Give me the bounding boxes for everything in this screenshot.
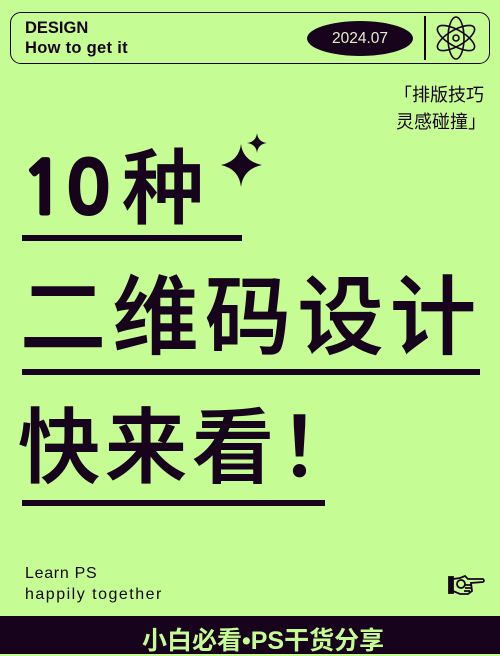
subtitle: 「排版技巧 <box>394 85 484 105</box>
banner text: 小白必看•PS干货分享 <box>142 627 384 655</box>
icon: sparkles <box>221 133 267 187</box>
character 种: 种 <box>122 122 204 241</box>
header bar <box>10 12 490 64</box>
title line 1 <box>21 122 204 241</box>
header text: DESIGN <box>25 19 88 37</box>
footer english text <box>25 565 163 603</box>
footer banner <box>0 616 500 654</box>
header frame <box>10 12 490 64</box>
title line 3: 快来看！ <box>18 381 366 500</box>
header text <box>25 19 128 57</box>
subtitle: 灵感碰撞」 <box>396 112 486 132</box>
footer english text: happily together <box>25 586 163 603</box>
number 10: 10 <box>21 153 111 225</box>
icon: pointing hand <box>448 575 485 595</box>
title line 2 underline <box>22 369 480 375</box>
header text: How to get it <box>25 39 128 57</box>
icon: atom <box>436 16 476 60</box>
title line 2: 二维码设计 <box>20 247 482 372</box>
title line 1 underline <box>22 235 242 241</box>
subtitle <box>394 85 486 132</box>
footer english text: Learn PS <box>25 565 97 582</box>
title line 3 underline <box>22 500 325 506</box>
date pill: 2024.07 <box>332 30 388 47</box>
header divider <box>424 16 426 60</box>
date pill <box>307 21 413 56</box>
